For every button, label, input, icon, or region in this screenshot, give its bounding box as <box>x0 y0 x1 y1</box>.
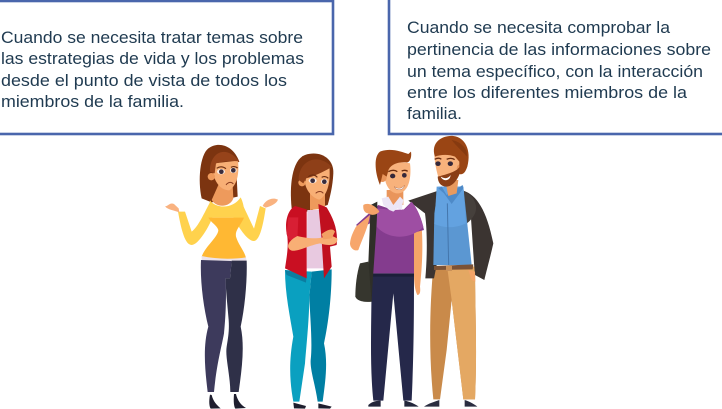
text block: right box: familia. <box>407 104 462 123</box>
text block: right box <box>407 18 711 123</box>
text block: right box: Cuando se necesita comprobar la <box>407 18 671 37</box>
text block: left box: miembros de la familia. <box>1 92 184 111</box>
panel: right speech box <box>389 0 722 134</box>
figure: man in purple sweater <box>350 150 424 407</box>
figure: woman in yellow top <box>165 145 278 409</box>
figure: woman in red jacket <box>285 154 337 409</box>
panel: left speech box <box>0 1 333 134</box>
text block: left box: desde el punto de vista de todos los <box>1 71 287 90</box>
text block: right box: entre los diferentes miembros de la <box>407 83 688 102</box>
text block: right box: pertinencia de las informaciones sobre <box>407 40 711 59</box>
text block: left box: las estrategias de vida y los problemas <box>1 49 304 68</box>
text block: left box <box>1 28 304 111</box>
text block: left box: Cuando se necesita tratar temas sobre <box>1 28 303 47</box>
figure: man with beard and blue shirt <box>408 136 493 407</box>
text block: right box: un tema específico, con la interacción <box>407 62 703 81</box>
